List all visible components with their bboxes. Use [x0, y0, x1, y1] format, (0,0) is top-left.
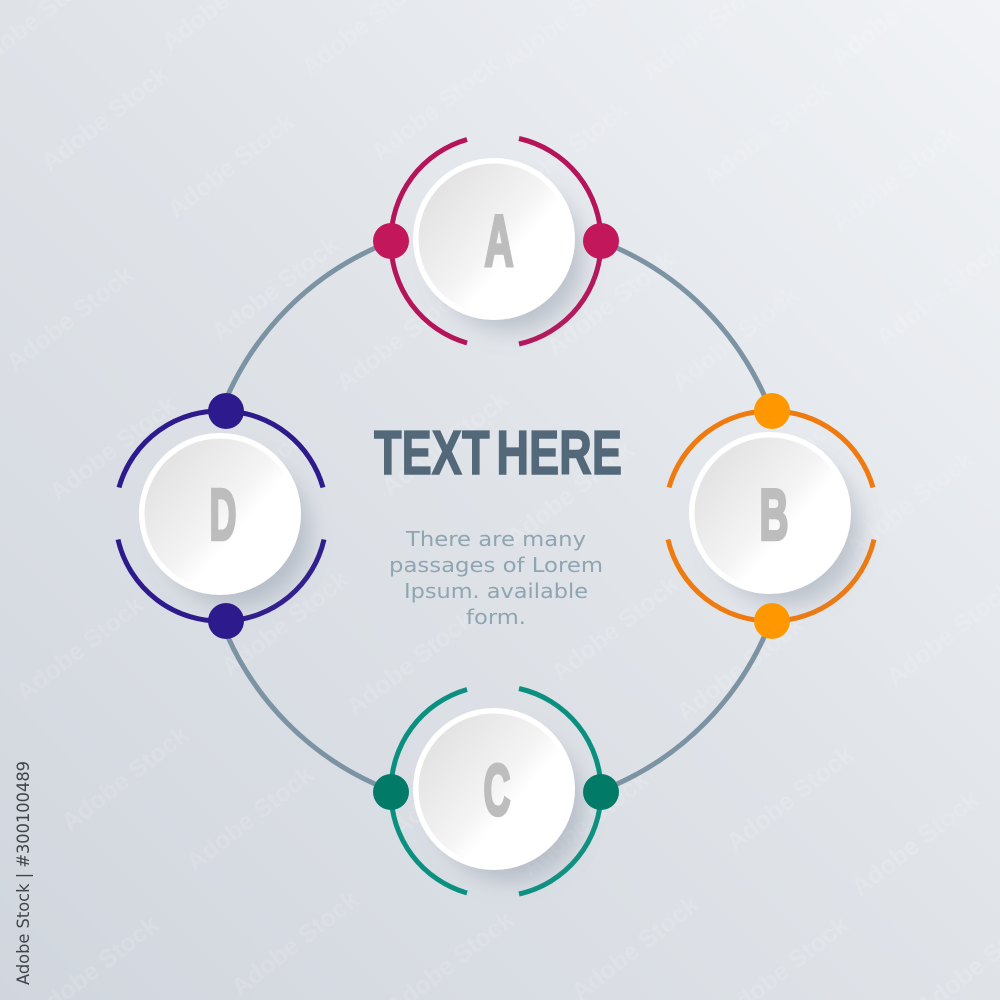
- watermark pattern: Adobe Stock: [56, 721, 194, 837]
- watermark pattern: Adobe Stock: [516, 766, 654, 882]
- watermark pattern: Adobe Stock: [331, 281, 469, 397]
- watermark pattern: Adobe Stock: [162, 108, 300, 224]
- node D top dot: [208, 393, 244, 429]
- node B top dot: [754, 393, 790, 429]
- watermark pattern: Adobe Stock: [171, 426, 309, 542]
- node C left dot: [373, 774, 409, 810]
- node A arcs: [391, 138, 601, 344]
- watermark pattern: Adobe Stock: [826, 121, 964, 237]
- node B: [668, 393, 874, 639]
- watermark pattern: Adobe Stock: [496, 96, 634, 212]
- watermark pattern: Adobe Stock: [376, 386, 514, 502]
- node B arcs: [668, 411, 874, 621]
- watermark pattern: Adobe Stock: [341, 606, 479, 722]
- body text: Ipsum. available: [404, 579, 588, 603]
- watermark pattern: Adobe Stock: [386, 726, 524, 842]
- node A letter: A: [484, 202, 514, 282]
- watermark pattern: Adobe Stock: [546, 571, 684, 687]
- node C arcs: [391, 688, 601, 894]
- node D arcs: [118, 411, 324, 621]
- title: TEXT HERE: [374, 419, 622, 488]
- node C shadow: [436, 733, 584, 881]
- watermark pattern: Adobe Stock: [698, 76, 836, 192]
- watermark pattern: Adobe Stock: [366, 51, 504, 167]
- node D letter: D: [210, 476, 236, 556]
- node B disc: [689, 432, 851, 594]
- watermark pattern: Adobe Stock: [226, 886, 364, 1000]
- watermark pattern: Adobe Stock: [706, 411, 844, 527]
- node A left dot: [373, 223, 409, 259]
- watermark pattern: Adobe Stock: [841, 446, 979, 562]
- node A: [373, 138, 619, 344]
- watermark pattern: Adobe Stock: [181, 761, 319, 877]
- node D bottom dot: [208, 603, 244, 639]
- node C disc: [413, 708, 575, 870]
- side credit: Adobe Stock | #300100489: [14, 761, 34, 985]
- node A shadow: [436, 183, 584, 331]
- watermark pattern: Adobe Stock: [666, 281, 804, 397]
- node B bottom dot: [754, 603, 790, 639]
- body text: form.: [466, 605, 526, 629]
- connector ring arcs: [227, 248, 765, 784]
- watermark pattern: Adobe Stock: [1, 261, 139, 377]
- node C: [373, 688, 619, 894]
- body text: [389, 527, 603, 629]
- watermark pattern: Adobe Stock: [501, 436, 639, 552]
- watermark pattern: Adobe Stock: [721, 741, 859, 857]
- body text: There are many: [405, 527, 586, 551]
- node B shadow: [712, 457, 860, 605]
- node A disc: [413, 158, 575, 320]
- node D disc: [139, 433, 301, 595]
- node B letter: B: [760, 476, 788, 556]
- watermark pattern: Adobe Stock: [11, 591, 149, 707]
- node D shadow: [162, 458, 310, 606]
- watermark pattern: Adobe Stock: [44, 391, 182, 507]
- watermark pattern: Adobe Stock: [846, 786, 984, 902]
- node D: [118, 393, 324, 639]
- node A right dot: [583, 223, 619, 259]
- watermark pattern: Adobe Stock: [36, 61, 174, 177]
- watermark pattern: Adobe Stock: [216, 566, 354, 682]
- watermark pattern: Adobe Stock: [206, 231, 344, 347]
- node C right dot: [583, 774, 619, 810]
- node C letter: C: [484, 751, 510, 831]
- watermark pattern: Adobe Stock: [671, 611, 809, 727]
- body text: passages of Lorem: [389, 553, 603, 577]
- watermark pattern: Adobe Stock: [541, 246, 679, 362]
